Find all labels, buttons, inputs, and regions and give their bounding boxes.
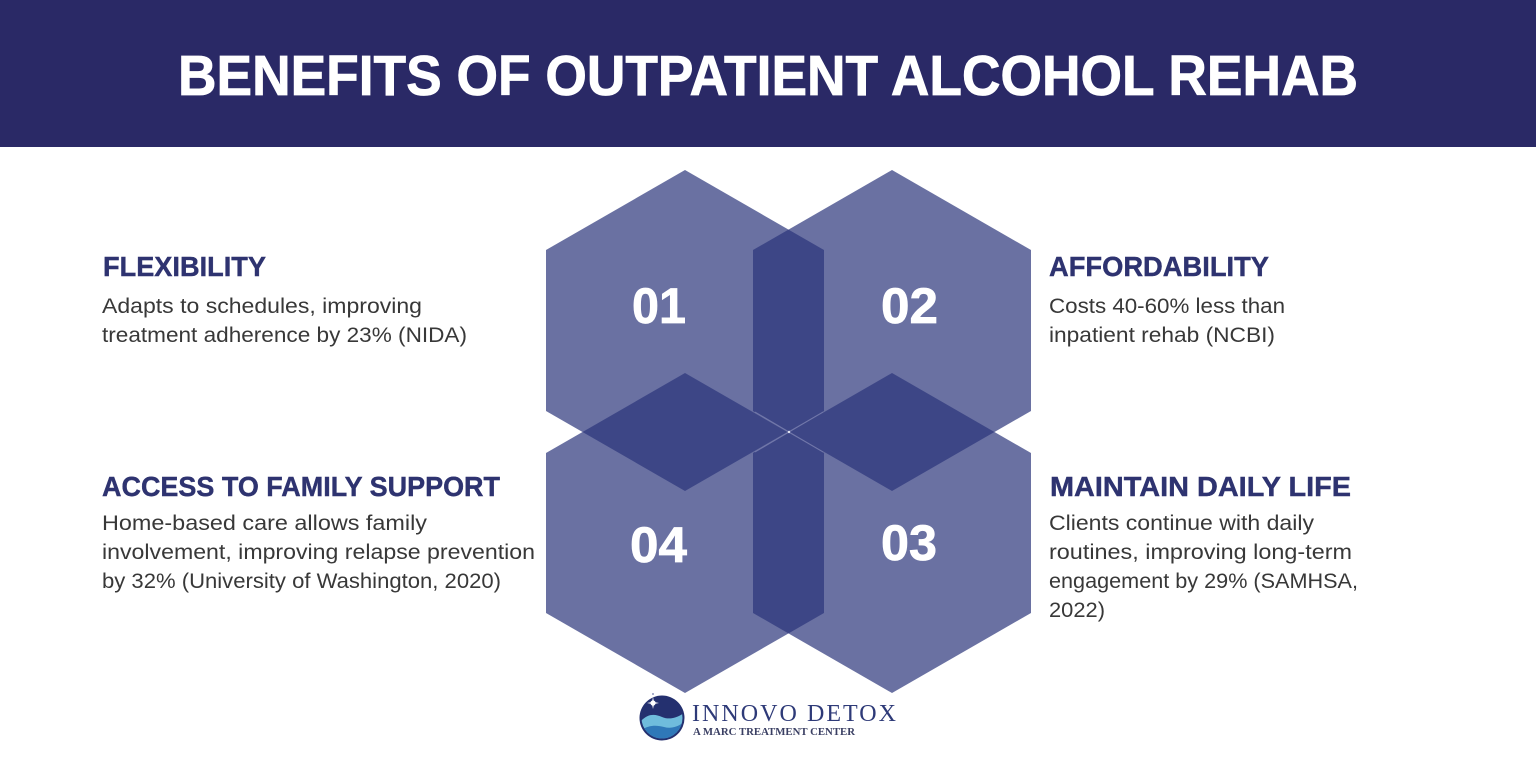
number 03: 03 <box>881 515 937 571</box>
icon: logo globe with waves <box>640 693 684 742</box>
hexagon cluster <box>546 170 1031 693</box>
logo: innovo detox <box>640 693 896 742</box>
hexagon 02 <box>753 170 1031 491</box>
body: access to family support <box>102 511 535 593</box>
text block: access to family support <box>102 471 535 593</box>
number 04: 04 <box>630 517 687 573</box>
body: affordability: Costs 40-60% less than <box>1049 294 1285 318</box>
number 02: 02 <box>881 278 938 334</box>
text block: maintain daily life <box>1049 471 1358 622</box>
logo tagline: A MARC TREATMENT CENTER <box>693 727 855 738</box>
text block: affordability <box>1049 251 1285 347</box>
number 01: 01 <box>632 278 686 334</box>
body: flexibility <box>102 294 467 347</box>
body: access to family support: by 32% (University of Washington, 2020) <box>102 569 501 593</box>
heading: access to family support: ACCESS TO FAMILY SUPPORT <box>102 471 500 502</box>
title: BENEFITS OF OUTPATIENT ALCOHOL REHAB <box>178 44 1358 108</box>
body: maintain daily life: Clients continue with daily <box>1049 511 1314 535</box>
body: affordability <box>1049 294 1285 347</box>
body: access to family support: Home-based care allows family <box>102 511 427 535</box>
heading: flexibility: FLEXIBILITY <box>103 251 266 282</box>
logo wordmark: INNOVO DETOX <box>692 701 896 727</box>
heading: maintain daily life: MAINTAIN DAILY LIFE <box>1050 471 1351 502</box>
body: access to family support: involvement, improving relapse prevention <box>102 540 535 564</box>
body: maintain daily life: 2022) <box>1049 598 1105 622</box>
body: maintain daily life: engagement by 29% (SAMHSA, <box>1049 569 1358 593</box>
hexagon 01 <box>546 170 824 491</box>
text block: flexibility <box>102 251 467 347</box>
body: affordability: inpatient rehab (NCBI) <box>1049 323 1275 347</box>
body: flexibility: Adapts to schedules, improving <box>102 294 422 318</box>
body: flexibility: treatment adherence by 23% (NIDA) <box>102 323 467 347</box>
heading: affordability: AFFORDABILITY <box>1049 251 1269 282</box>
hexagon 03 <box>753 373 1031 693</box>
header banner <box>0 0 1536 147</box>
hexagon 04 <box>546 373 824 693</box>
body: maintain daily life: routines, improving long-term <box>1049 540 1352 564</box>
body: maintain daily life <box>1049 511 1358 622</box>
